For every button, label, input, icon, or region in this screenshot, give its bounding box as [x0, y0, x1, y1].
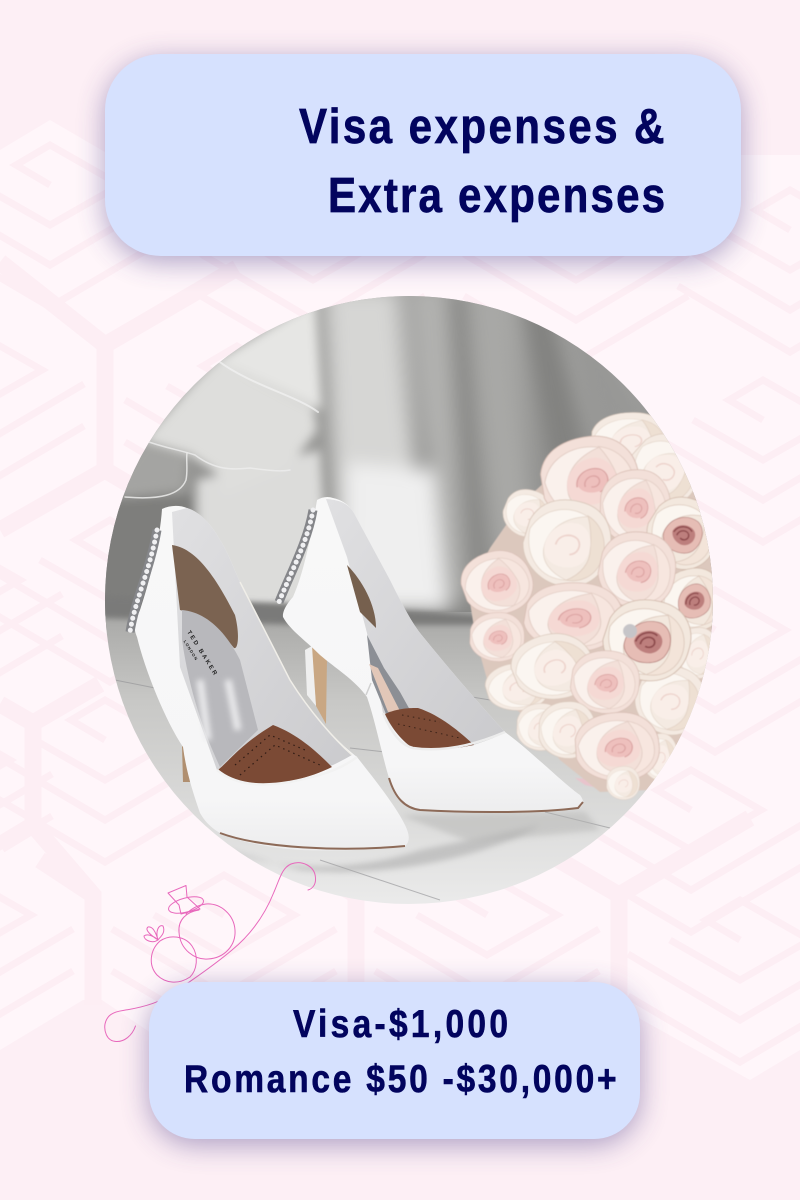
price text: Romance $50 -$30,000+ — [184, 1057, 617, 1101]
ruffle — [125, 360, 318, 498]
title text: Extra expenses — [328, 168, 665, 223]
right shoe — [279, 497, 583, 812]
interior — [326, 499, 505, 749]
floor — [100, 596, 720, 912]
title text: Visa expenses & — [299, 99, 664, 154]
price text: Visa-$1,000 — [293, 1002, 508, 1046]
left shoe — [130, 506, 409, 851]
stiletto heel — [311, 646, 327, 724]
dress backdrop — [100, 290, 720, 630]
crystal trim — [279, 510, 313, 602]
crystal trim — [130, 530, 157, 632]
insole brand label: TED BAKER — [185, 630, 218, 678]
photo: wedding shoes and rose bouquet in a circle — [100, 290, 731, 912]
rose bouquet — [452, 413, 731, 800]
insole brand label: LONDON — [183, 639, 199, 662]
interior — [172, 508, 352, 785]
doodle: snowman line drawing with hat and bow — [105, 863, 316, 1042]
title card — [105, 54, 741, 262]
price text — [184, 1002, 617, 1101]
info card — [149, 982, 640, 1145]
title text — [299, 99, 665, 223]
